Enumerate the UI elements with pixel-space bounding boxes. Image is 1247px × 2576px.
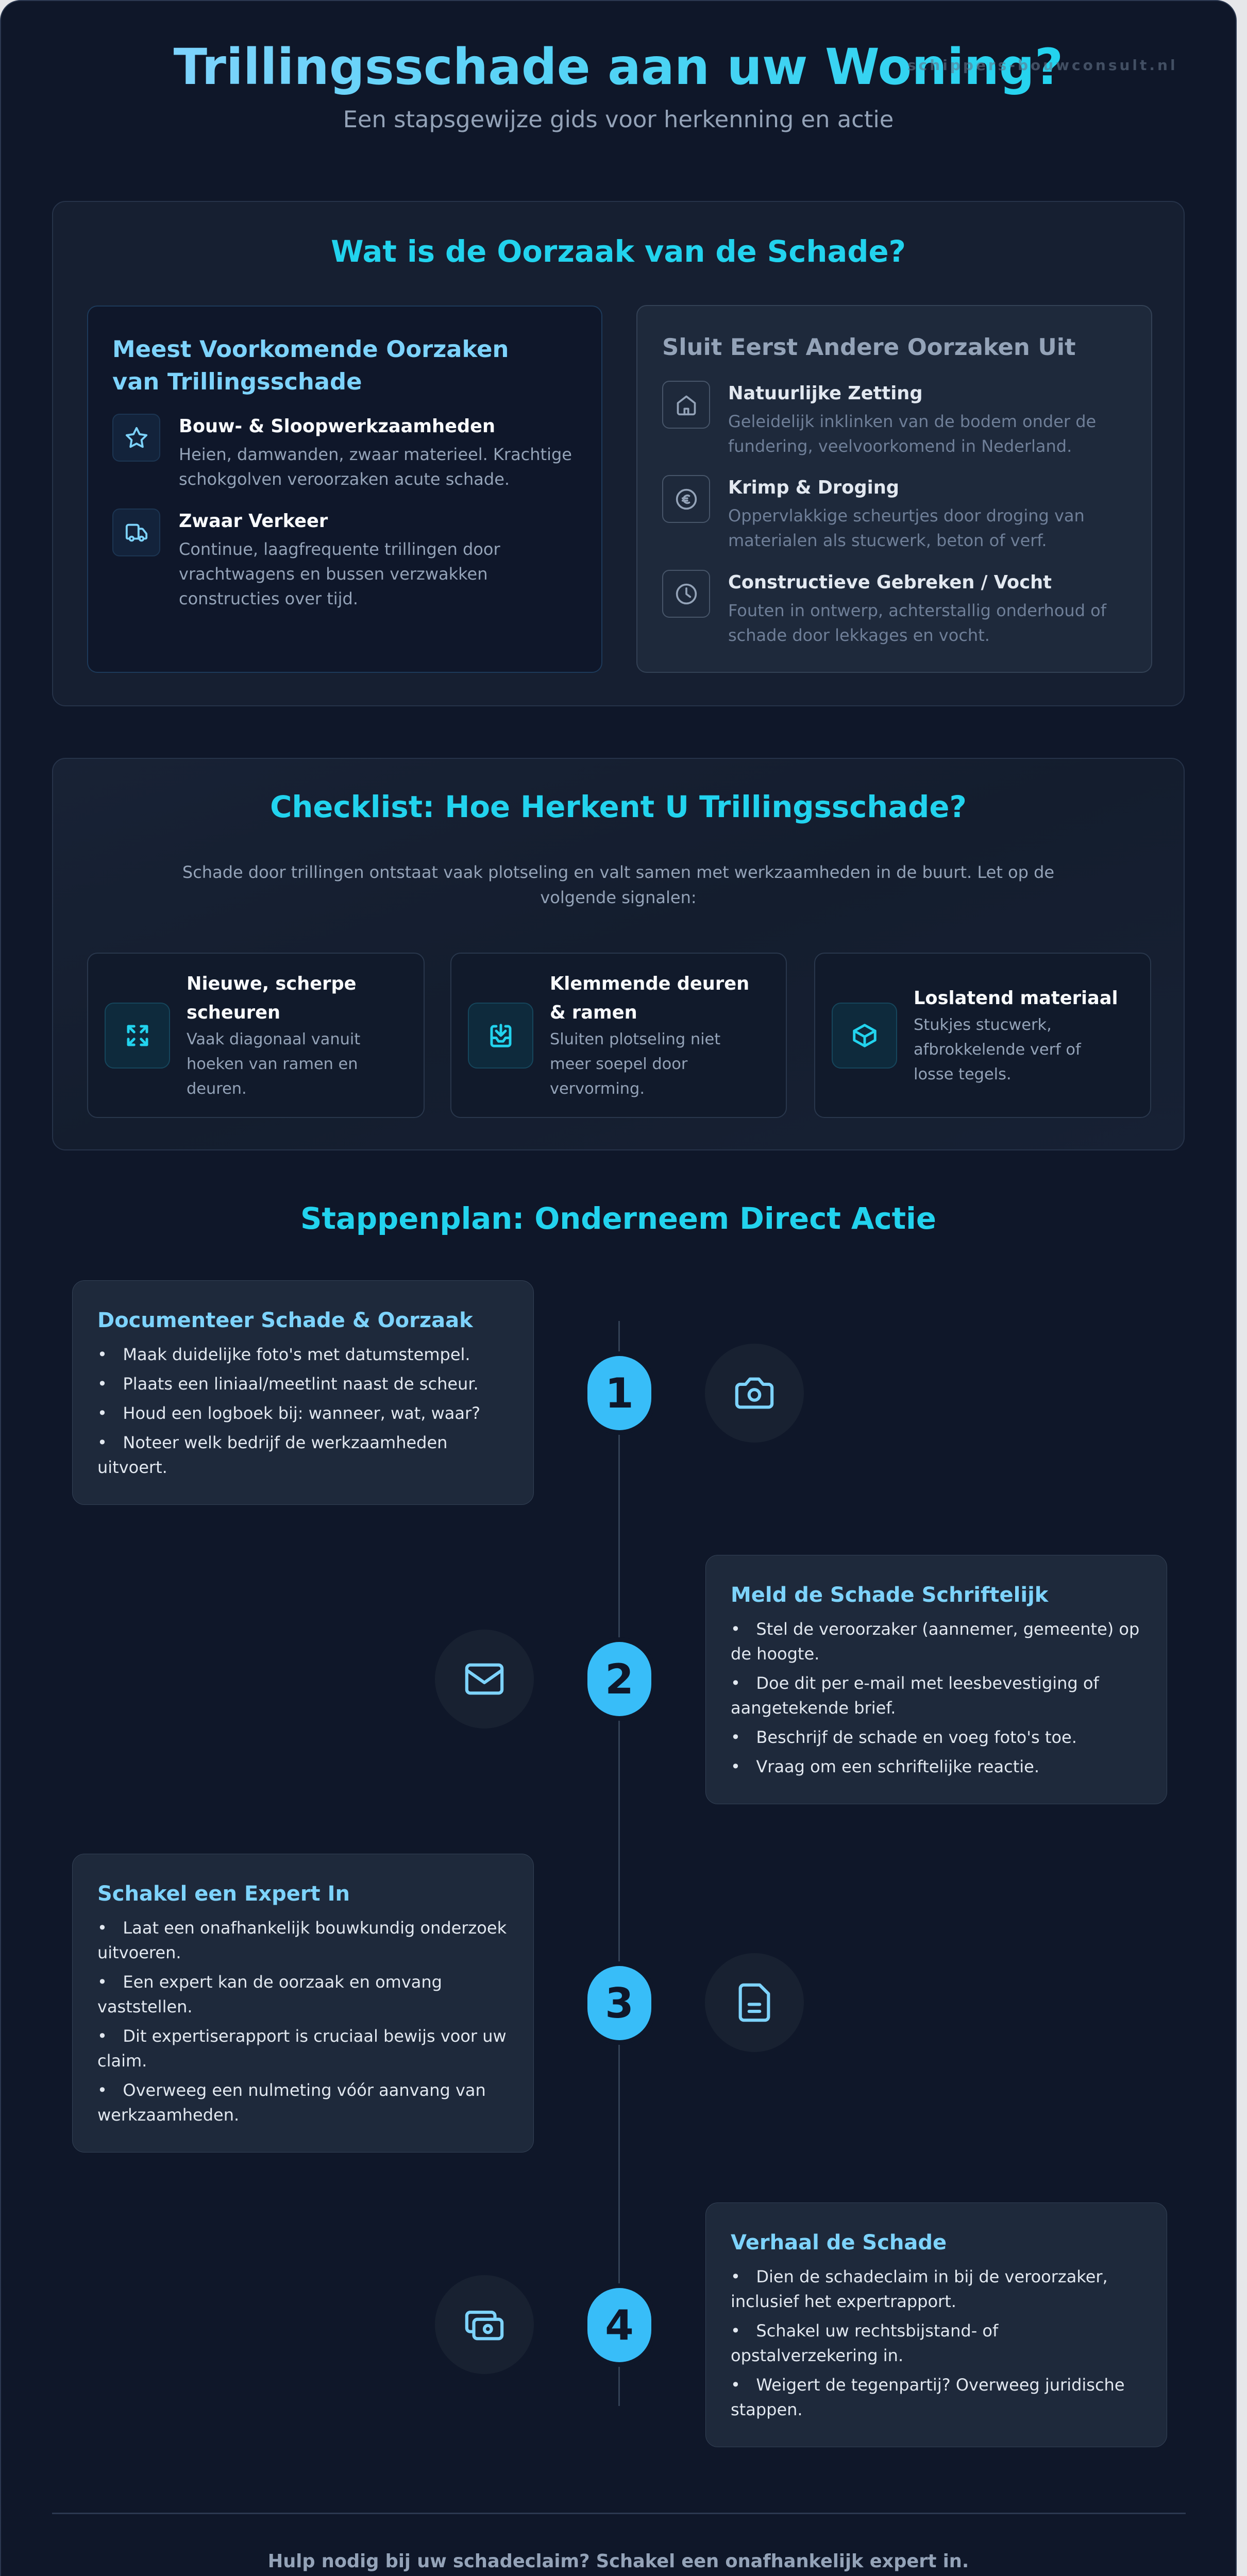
item title: Natuurlijke Zetting — [728, 383, 923, 404]
badge 1: 1 — [605, 1369, 634, 1417]
step 4 card — [705, 2202, 1167, 2447]
step 4 card: Verhaal de Schade — [731, 2231, 947, 2255]
badge 2: 2 — [605, 1655, 634, 1703]
badge 3: 3 — [605, 1979, 634, 2027]
card heading: Meest Voorkomende Oorzaken — [112, 335, 509, 363]
icon: inbox — [468, 1003, 533, 1069]
icon: expand arrows — [105, 1003, 170, 1069]
card: cracks — [87, 953, 425, 1118]
icon: cube — [832, 1003, 897, 1069]
icon: banknotes — [435, 2275, 534, 2374]
step 2 card: • Doe dit per e-mail met leesbevestiging of aangetekende brief. — [731, 1673, 1099, 1718]
text: Vaak diagonaal vanuit hoeken van ramen en deuren. — [187, 1030, 360, 1097]
item desc: Continue, laagfrequente trillingen door vrachtwagens en bussen verzwakken constructies over tijd. — [179, 539, 500, 608]
text: Loslatend materiaal — [914, 987, 1118, 1009]
step 3 card: • Overweeg een nulmeting vóór aanvang van werkzaamheden. — [97, 2080, 486, 2125]
icon: star — [112, 414, 160, 462]
step 1 card: Documenteer Schade & Oorzaak — [97, 1309, 473, 1332]
icon: euro — [662, 475, 710, 523]
step 2 card: • Stel de veroorzaker (aannemer, gemeente) op de hoogte. — [731, 1619, 1139, 1664]
text — [187, 973, 360, 1097]
card: common causes — [87, 306, 602, 673]
badge 1 — [587, 1356, 651, 1430]
item desc: Fouten in ontwerp, achterstallig onderhoud of schade door lekkages en vocht. — [728, 601, 1106, 645]
step 3 card: • Een expert kan de oorzaak en omvang vaststellen. — [97, 1972, 442, 2016]
step 1 card: • Maak duidelijke foto's met datumstempel. — [97, 1345, 470, 1364]
footer text: Hulp nodig bij uw schadeclaim? Schakel een onafhankelijk expert in. — [268, 2551, 969, 2572]
item title: Zwaar Verkeer — [179, 511, 328, 532]
icon: document — [705, 1953, 804, 2052]
watermark: schippers-bouwconsult.nl — [907, 57, 1178, 74]
subtitle: Een stapsgewijze gids voor herkenning en actie — [343, 106, 894, 133]
card heading: Sluit Eerst Andere Oorzaken Uit — [662, 333, 1076, 361]
intro text: Schade door trillingen ontstaat vaak plotseling en valt samen met werkzaamheden in de buurt. Let op de volgende signalen: — [182, 862, 1054, 907]
text — [914, 987, 1118, 1083]
text: Sluiten plotseling niet meer soepel door vervorming. — [550, 1030, 720, 1097]
step 2 card: Meld de Schade Schriftelijk — [731, 1583, 1048, 1607]
step 2 card: • Vraag om een schriftelijke reactie. — [731, 1757, 1039, 1776]
text: Nieuwe, scherpe scheuren — [187, 973, 357, 1023]
item title: Constructieve Gebreken / Vocht — [728, 572, 1052, 593]
step 3 card: • Dit expertiserapport is cruciaal bewijs voor uw claim. — [97, 2026, 507, 2071]
step 1 card — [72, 1280, 534, 1505]
item desc: Oppervlakkige scheurtjes door droging van materialen als stucwerk, beton of verf. — [728, 506, 1085, 550]
step 3 card: Schakel een Expert In — [97, 1882, 350, 1906]
panel: causes — [52, 201, 1185, 706]
item desc: Heien, damwanden, zwaar materieel. Krachtige schokgolven veroorzaken acute schade. — [179, 445, 572, 489]
icon: house — [662, 381, 710, 429]
card: loose material — [814, 953, 1151, 1118]
step 4 card: • Dien de schadeclaim in bij de veroorzaker, inclusief het expertrapport. — [731, 2267, 1108, 2311]
step 4 card: • Weigert de tegenpartij? Overweeg juridische stappen. — [731, 2375, 1125, 2419]
text — [550, 973, 749, 1097]
card: exclude other causes — [636, 305, 1152, 673]
text: Stukjes stucwerk, afbrokkelende verf of losse tegels. — [914, 1016, 1081, 1083]
timeline line — [618, 1321, 620, 2406]
card heading: van Trillingsschade — [112, 368, 362, 395]
icon: clock — [662, 570, 710, 618]
card: doors — [450, 953, 787, 1118]
text: Klemmende deuren & ramen — [550, 973, 749, 1023]
step 3 card — [72, 1854, 534, 2153]
icon: mail — [435, 1630, 534, 1728]
badge 4: 4 — [605, 2301, 634, 2349]
icon: camera — [705, 1344, 804, 1443]
step 2 card — [705, 1555, 1167, 1804]
step 1 card: • Noteer welk bedrijf de werkzaamheden uitvoert. — [97, 1433, 447, 1477]
panel: checklist — [52, 758, 1185, 1150]
step 4 card: • Schakel uw rechtsbijstand- of opstalverzekering in. — [731, 2321, 998, 2365]
badge 2 — [587, 1642, 651, 1716]
step 2 card: • Beschrijf de schade en voeg foto's toe. — [731, 1727, 1077, 1747]
icon: truck — [112, 509, 160, 556]
heading: checklist: Checklist: Hoe Herkent U Trillingsschade? — [270, 790, 967, 824]
title: Trillingsschade aan uw Woning? — [174, 38, 1063, 96]
badge 3 — [587, 1966, 651, 2040]
badge 4 — [587, 2288, 651, 2362]
card heading — [112, 335, 509, 395]
item desc: Geleidelijk inklinken van de bodem onder de fundering, veelvoorkomend in Nederland. — [728, 412, 1096, 456]
heading: causes: Wat is de Oorzaak van de Schade? — [331, 234, 906, 269]
step 3 card: • Laat een onafhankelijk bouwkundig onderzoek uitvoeren. — [97, 1918, 507, 1962]
heading: steps: Stappenplan: Onderneem Direct Actie — [300, 1201, 936, 1236]
step 1 card: • Plaats een liniaal/meetlint naast de scheur. — [97, 1374, 479, 1394]
footer divider — [52, 2513, 1186, 2514]
item title: Bouw- & Sloopwerkzaamheden — [179, 416, 495, 437]
step 1 card: • Houd een logboek bij: wanneer, wat, waar? — [97, 1403, 480, 1423]
item title: Krimp & Droging — [728, 477, 899, 498]
